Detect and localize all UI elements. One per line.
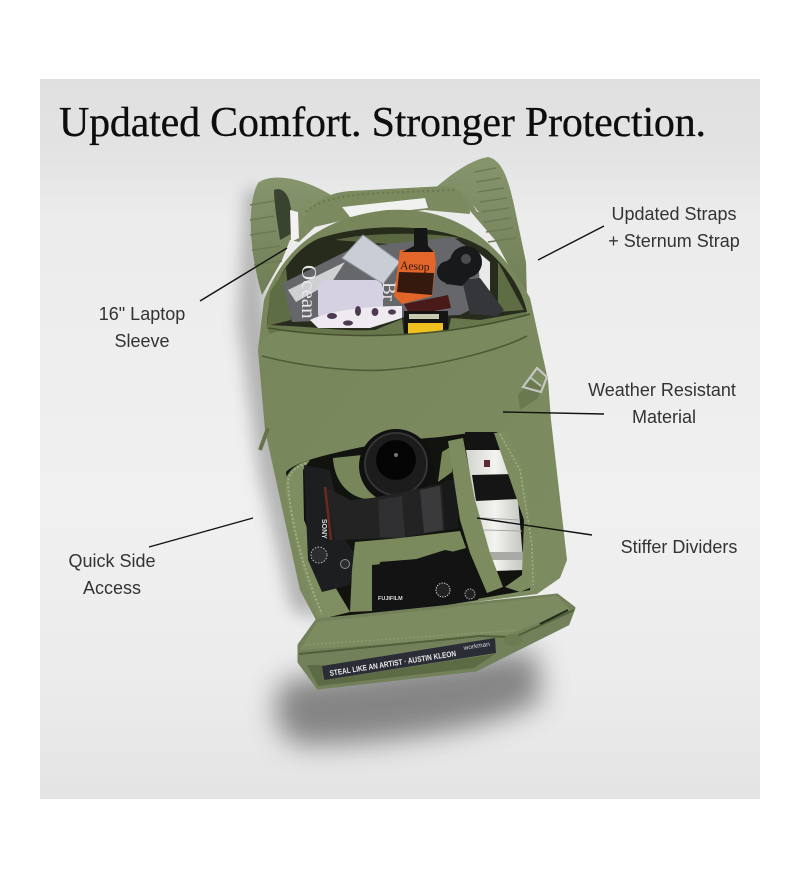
orange bottle [394,228,436,304]
floral pouch [310,306,402,328]
side buckle [518,368,547,410]
compartment lining left [285,460,350,620]
book spine: STEAL LIKE AN ARTIST · AUSTIN KLEON [329,649,457,678]
callout: laptop sleeve: 16" Laptop [99,304,185,324]
fujifilm camera: FUJIFILM [378,596,403,602]
callout: updated straps: + Sternum Strap [608,231,740,251]
zoom lens [325,478,458,540]
callout: updated straps [538,204,740,260]
left shoulder strap [250,178,334,295]
top compartment [266,227,530,346]
callout: quick side access: Access [83,578,141,598]
film canister [404,295,451,334]
orange bottle: Aesop [400,260,430,274]
upper padded divider [333,446,452,499]
sony camera body: SONY [320,519,327,539]
fold-down front pouch [299,595,574,688]
compartment lining right [494,432,537,592]
top carry handle [303,186,470,228]
callout: quick side access [68,518,253,598]
book spine: workman [462,641,491,652]
pocket lip [266,312,530,346]
backpack illustration [238,157,574,745]
callout: weather resistant [503,380,736,427]
callout: laptop sleeve: Sleeve [114,331,170,351]
right shoulder strap [433,157,527,300]
callout: quick side access: Quick Side [68,551,156,571]
interior [267,227,527,336]
sony camera body [304,465,356,592]
lavender compact [318,280,383,322]
callout: weather resistant: Material [632,407,696,427]
telephoto lens [465,432,524,571]
compartment interior [286,432,533,618]
callout: updated straps: Updated Straps [611,204,737,224]
drop shadow [238,190,542,745]
title: Updated Comfort. Stronger Protection. [59,100,706,146]
action camera gimbal [437,246,504,316]
camera compartment [285,429,537,620]
callout: stiffer dividers: Stiffer Dividers [621,537,737,557]
fujifilm camera [372,550,480,611]
laptop text: Ocean [297,265,321,319]
wide angle front element [359,429,433,503]
laptop text 2: Br [378,282,399,302]
vertical padded divider [448,438,503,593]
callout: stiffer dividers [477,518,737,557]
horizontal padded divider [350,531,466,612]
front top flap [258,314,532,370]
callout: laptop sleeve [99,248,287,351]
side zipper pull [260,428,268,450]
laptop [283,237,490,322]
callout: weather resistant: Weather Resistant [588,380,736,400]
silver case [342,235,400,284]
background panel [40,79,760,799]
backpack body [258,210,567,622]
